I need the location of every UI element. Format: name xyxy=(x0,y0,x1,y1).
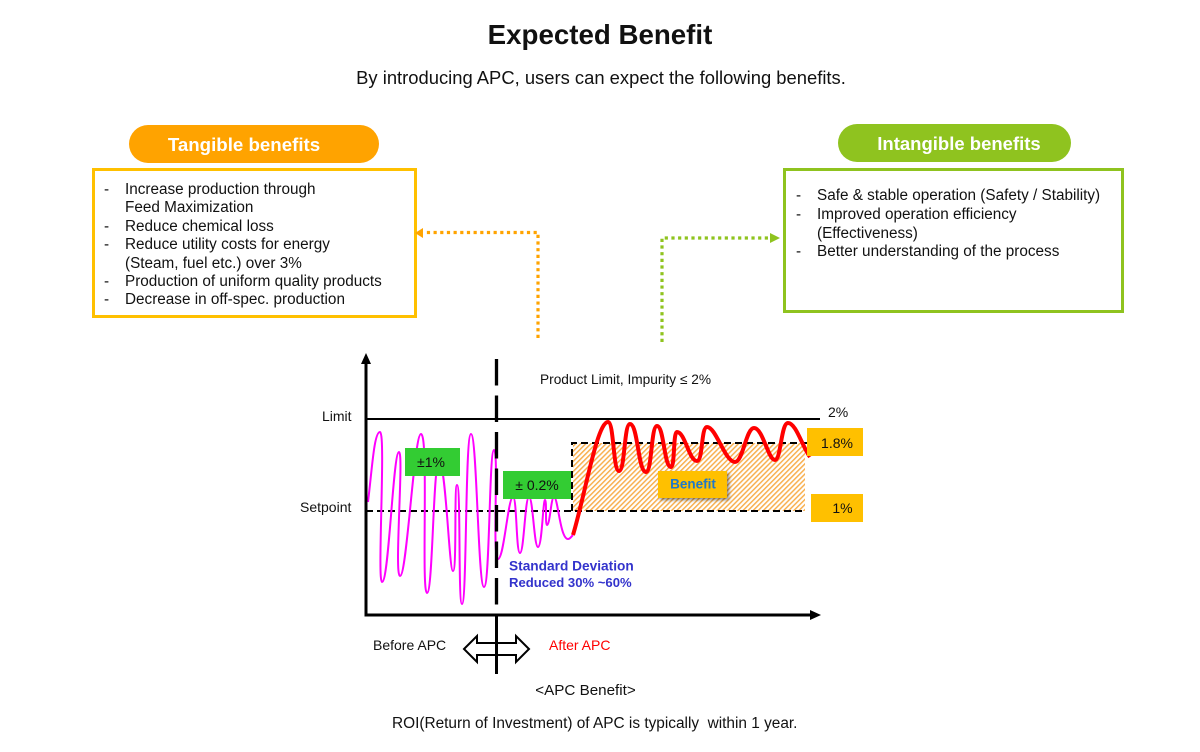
tangible benefits list: (Steam, fuel etc.) over 3% xyxy=(125,255,302,272)
standard deviation callout: Reduced 30% ~60% xyxy=(509,575,632,590)
badge: 1 percent xyxy=(811,494,863,522)
intangible benefits list: - xyxy=(796,206,801,223)
red line: optimized operation xyxy=(573,422,810,535)
tangible benefits list: - xyxy=(104,181,109,198)
badge: plus/minus 0.2 percent: ± 0.2% xyxy=(515,477,559,493)
title: Expected Benefit xyxy=(488,19,712,50)
tangible benefits list: Increase production through xyxy=(125,181,316,198)
subtitle: By introducing APC, users can expect the following benefits. xyxy=(356,67,846,88)
tangible benefits list: - xyxy=(104,218,109,235)
benefit area dashed outline xyxy=(572,443,808,511)
ROI note: ROI(Return of Investment) of APC is typically within 1 year. xyxy=(392,715,797,732)
2 percent label: 2% xyxy=(828,404,848,420)
limit line xyxy=(366,418,820,420)
tangible benefits list: Feed Maximization xyxy=(125,199,253,216)
intangible benefits list: (Effectiveness) xyxy=(817,225,918,242)
tangible benefits list: Production of uniform quality products xyxy=(125,273,382,290)
chart caption: <APC Benefit> xyxy=(535,682,636,699)
panel: tangible benefits xyxy=(94,125,416,316)
badge: plus/minus 1 percent: ±1% xyxy=(417,454,445,470)
intangible heading pill xyxy=(838,124,1071,162)
intangible heading pill: Intangible benefits xyxy=(877,133,1041,154)
tangible benefits list: Reduce utility costs for energy xyxy=(125,236,330,253)
tangible benefits list: Decrease in off-spec. production xyxy=(125,291,345,308)
APC start divider xyxy=(495,359,498,605)
intangible benefits list: Safe & stable operation (Safety / Stability) xyxy=(817,187,1100,204)
arrow: chart to intangible benefits xyxy=(662,233,780,342)
setpoint dashed line xyxy=(366,510,806,512)
y labels: Limit xyxy=(322,408,352,424)
tangible benefits list: - xyxy=(104,291,109,308)
tangible benefits list xyxy=(94,170,416,316)
y labels xyxy=(300,408,352,515)
after APC label: After APC xyxy=(549,637,610,653)
tangible heading pill: Tangible benefits xyxy=(168,134,320,155)
intangible benefits list xyxy=(784,170,1122,312)
before APC label: Before APC xyxy=(373,637,446,653)
tangible benefits list: - xyxy=(104,273,109,290)
before/after double arrow xyxy=(464,615,529,674)
standard deviation callout xyxy=(509,558,634,590)
axes xyxy=(361,353,821,620)
arrow: chart to tangible benefits xyxy=(415,228,538,338)
badge: plus/minus 1 percent xyxy=(405,448,460,476)
badge: benefit xyxy=(658,471,727,498)
badge: 1 percent: 1% xyxy=(832,500,853,516)
badge: benefit: Benefit xyxy=(670,476,716,492)
badge: 1.8 percent xyxy=(807,428,863,456)
chart: APC benefit xyxy=(300,353,863,674)
badge: plus/minus 0.2 percent xyxy=(503,471,571,499)
panel: intangible benefits xyxy=(784,124,1122,312)
y labels: Setpoint xyxy=(300,499,351,515)
standard deviation callout: Standard Deviation xyxy=(509,558,634,574)
intangible benefits list: - xyxy=(796,187,801,204)
intangible benefits list: Better understanding of the process xyxy=(817,243,1060,260)
tangible heading pill xyxy=(129,125,379,163)
tangible benefits list: - xyxy=(104,236,109,253)
magenta line: before and after APC xyxy=(368,432,573,604)
tangible benefits list: Reduce chemical loss xyxy=(125,218,274,235)
badge: 1.8 percent: 1.8% xyxy=(821,435,853,451)
intangible benefits list: Improved operation efficiency xyxy=(817,206,1017,223)
benefit hatched area xyxy=(573,443,805,511)
product limit label: Product Limit, Impurity ≤ 2% xyxy=(540,372,711,387)
intangible benefits list: - xyxy=(796,243,801,260)
